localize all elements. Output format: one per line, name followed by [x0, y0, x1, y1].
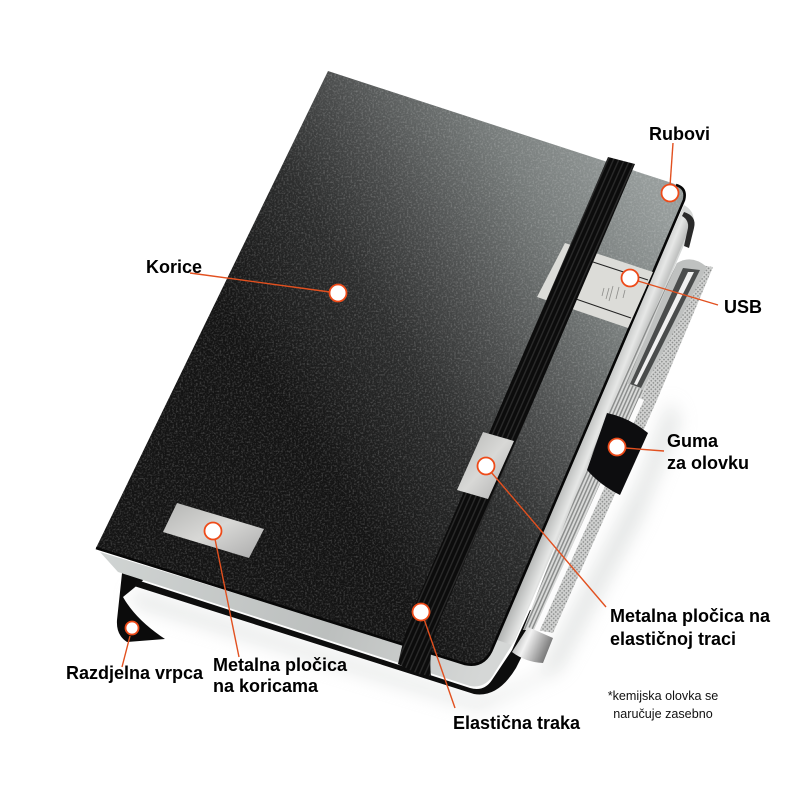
label: Metalna plocica na koricama: na koricama: [213, 676, 319, 696]
pen cap: [512, 627, 553, 663]
label: Metalna plocica na koricama: Metalna pločica: [213, 655, 347, 675]
footnote: naručuje zasebno: [613, 707, 713, 721]
notebook cover: [96, 71, 685, 665]
leader lines: [122, 143, 718, 708]
pen: [512, 259, 713, 663]
marker: Guma za olovku: [608, 438, 626, 456]
label: Rubovi: Rubovi: [649, 124, 710, 144]
pen barrel knurled left: [523, 263, 700, 630]
footnote: *kemijska olovka se: [608, 689, 718, 703]
pen clip: [627, 259, 707, 390]
elastic band: [398, 157, 635, 676]
USB plate: [537, 243, 653, 328]
label: Korice: Korice: [146, 257, 202, 277]
back cover and page block: [100, 205, 695, 694]
pen barrel knurled right: [537, 265, 713, 633]
marker: Korice: [330, 284, 346, 302]
label: Guma za olovku: za olovku: [667, 453, 749, 473]
marker: USB: [622, 270, 638, 286]
pen loop: [587, 413, 648, 495]
bookmark ribbon: [117, 564, 165, 642]
label: Metalna plocica na elasticnoj traci: elastičnoj traci: [610, 629, 736, 649]
label: Elasticna traka: Elastična traka: [453, 713, 581, 733]
label: USB: USB: [724, 297, 762, 317]
label: Razdjelna vrpca: Razdjelna vrpca: [66, 663, 204, 683]
marker: Razdjelna vrpca: [126, 622, 138, 634]
metal plate on cover: [163, 503, 264, 558]
label: Metalna plocica na elasticnoj traci: Metalna pločica na: [610, 606, 770, 626]
metal plate on elastic band: [457, 432, 514, 499]
pen highlight: [534, 398, 644, 632]
marker: Metalna plocica na elasticnoj traci: [478, 458, 494, 474]
soft shadow: [130, 400, 680, 710]
label: Guma za olovku: Guma: [667, 431, 718, 451]
marker: Rubovi: [662, 184, 678, 202]
marker: Elasticna traka: [412, 604, 430, 620]
marker: Metalna plocica na koricama: [204, 522, 222, 540]
